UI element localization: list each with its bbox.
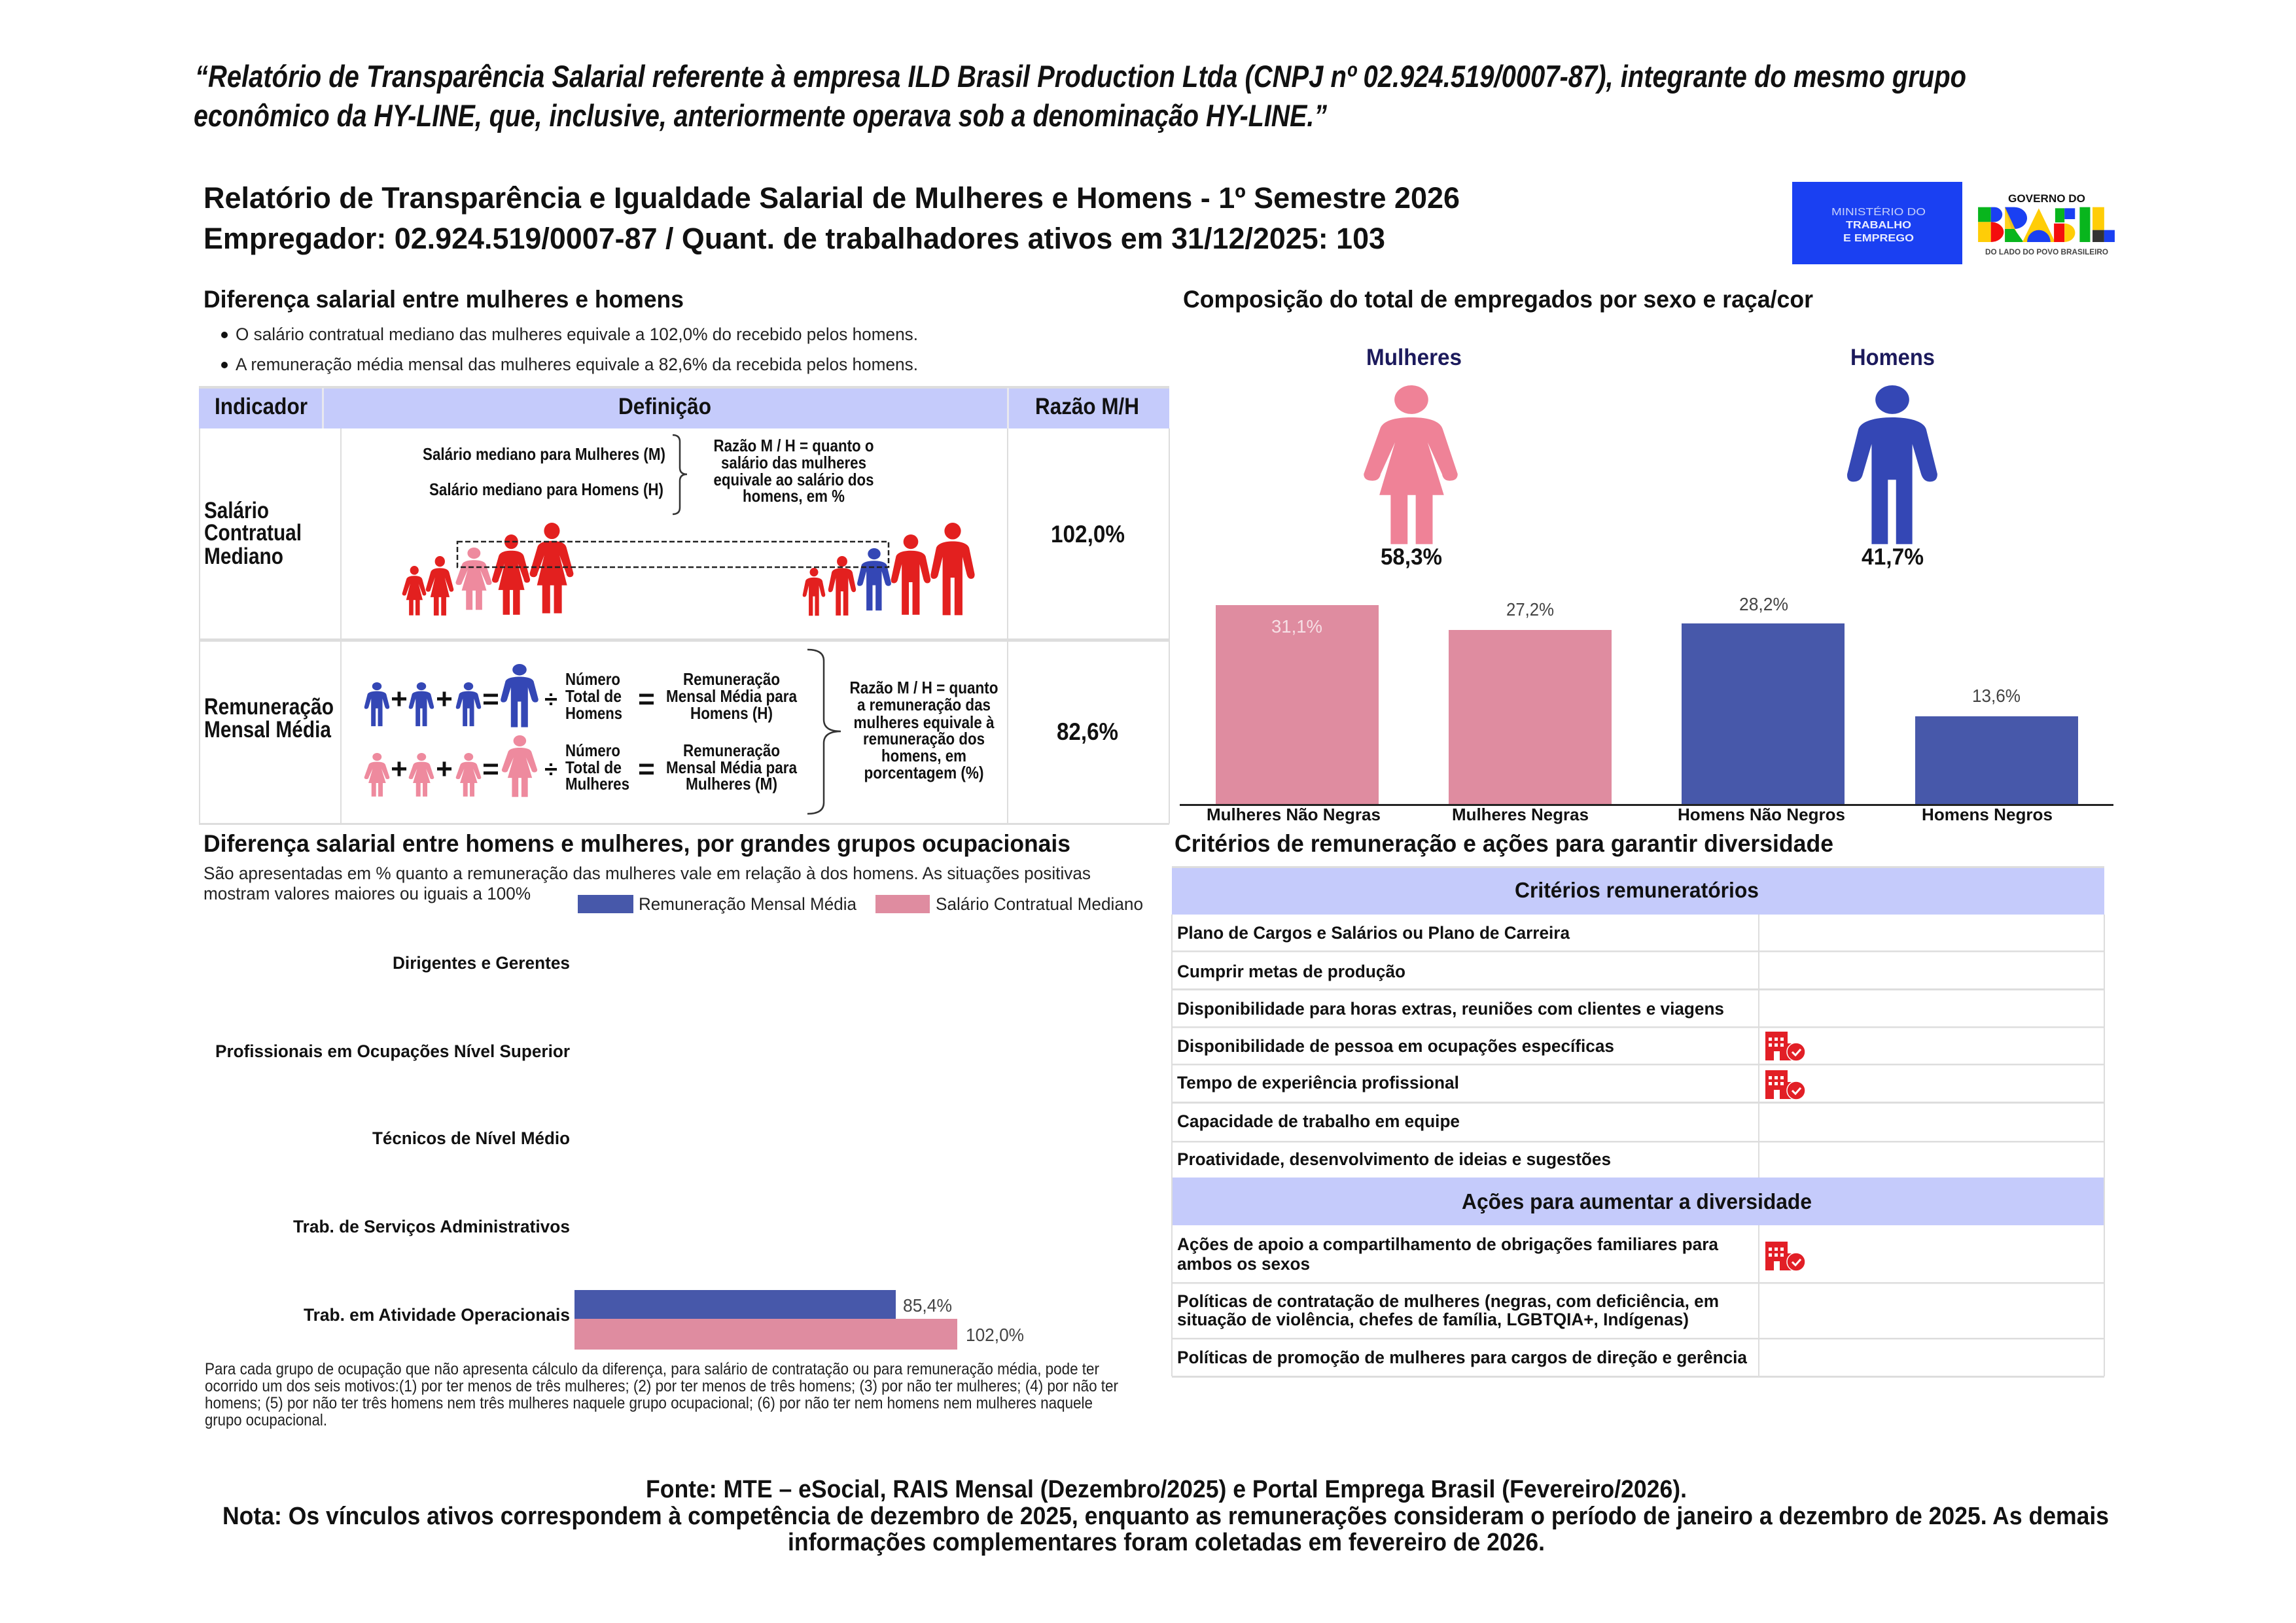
- logo: Ministério do Trabalho e Emprego: TRABALHO: [1846, 220, 1911, 231]
- actions list: Ações de apoio a compartilhamento de obrigações familiares para: [1177, 1234, 1719, 1254]
- value: 102,0%: 102,0%: [1051, 521, 1125, 548]
- legend: [578, 894, 1143, 914]
- icon group: women share: [1364, 345, 1462, 570]
- formula: women average pay: +: [436, 753, 453, 785]
- formula: men average pay: Total de: [565, 686, 622, 706]
- heading: occupational groups: Diferença salarial entre homens e mulheres, por grandes grupos ocupacionais: [203, 830, 1070, 857]
- criteria list: Plano de Cargos e Salários ou Plano de Carreira: [1177, 923, 1570, 943]
- formula: men average pay: [364, 664, 797, 727]
- footnote on missing groups: Para cada grupo de ocupação que não apresenta cálculo da diferença, para salário de contratação ou para remuneração média, pode ter: [205, 1360, 1099, 1378]
- logo: Governo do Brasil: DO LADO DO POVO BRASILEIRO: [1985, 247, 2108, 256]
- icon group: women share: 58,3%: [1381, 544, 1442, 570]
- bar: Homens Não Negros: Homens Não Negros: [1678, 805, 1845, 824]
- heading: wage gap: Diferença salarial entre mulheres e homens: [203, 286, 684, 313]
- criteria list: Capacidade de trabalho em equipe: [1177, 1111, 1460, 1131]
- table bands and rules: [1171, 866, 2105, 1378]
- formula: women average pay: Remuneração: [683, 741, 780, 760]
- logo: Ministério do Trabalho e Emprego: [1792, 182, 1962, 264]
- ratio explanation: average pay: remuneração dos: [863, 729, 985, 748]
- band title: ações para aumentar a diversidade: Ações para aumentar a diversidade: [1462, 1189, 1812, 1213]
- quoted note at top of page: econômico da HY-LINE, que, inclusive, anteriormente operava sob a denominação HY-LINE.”: [194, 98, 1327, 133]
- criteria list: Tempo de experiência profissional: [1177, 1073, 1459, 1092]
- row label: remuneração mensal média: Mensal Média: [204, 717, 331, 742]
- icon group: men share: 41,7%: [1862, 544, 1924, 570]
- formula: men average pay: Homens: [565, 703, 622, 723]
- chart axis: [1180, 804, 2113, 806]
- ratio explanation: median wage: [713, 436, 874, 506]
- panel: indicators table: [199, 386, 1170, 825]
- median wage definition text: Salário mediano para Homens (H): [429, 480, 663, 499]
- formula: women average pay: Número: [565, 741, 620, 760]
- bar chart: occupational groups: [215, 953, 1024, 1350]
- criteria list: [1177, 923, 1724, 1169]
- logo: Ministério do Trabalho e Emprego: E EMPREGO: [1843, 233, 1914, 244]
- formula: men average pay: +: [391, 683, 408, 715]
- bar: Mulheres Negras: [1449, 599, 1612, 824]
- report title: Empregador: 02.924.519/0007-87 / Quant. de trabalhadores ativos em 31/12/2025: 103: [203, 222, 1385, 255]
- table column headers: Razão M/H: [1035, 394, 1139, 419]
- formula: men average pay: +: [436, 683, 453, 715]
- logo: Ministério do Trabalho e Emprego: MINISTÉRIO DO: [1831, 205, 1926, 218]
- source and note: informações complementares foram coletadas em fevereiro de 2026.: [788, 1529, 1545, 1556]
- ratio explanation: average pay: Razão M / H = quanto: [849, 678, 998, 697]
- criteria list: Cumprir metas de produção: [1177, 962, 1405, 981]
- actions list: situação de violência, chefes de família, LGBTQIA+, Indígenas): [1177, 1310, 1689, 1329]
- bar: remuneração mensal média 85,4%: 85,4%: [903, 1295, 952, 1316]
- formula: women average pay: [364, 735, 797, 797]
- heading: criteria and actions: Critérios de remuneração e ações para garantir diversidade: [1174, 830, 1833, 857]
- criteria list: Proatividade, desenvolvimento de ideias e sugestões: [1177, 1149, 1611, 1169]
- formula: men average pay: =: [638, 683, 655, 715]
- row label: salário contratual mediano: Mediano: [204, 544, 283, 569]
- formula: women average pay: =: [638, 753, 655, 785]
- logo: Governo do Brasil: GOVERNO DO: [2008, 192, 2085, 205]
- bar: Homens Não Negros: [1678, 594, 1845, 824]
- footnote on missing groups: ocorrido um dos seis motivos:(1) por ter menos de três mulheres; (2) por ter menos de três homens; (3) por não ter mulheres; (4) por não ter: [205, 1377, 1118, 1395]
- footnote on missing groups: grupo ocupacional.: [205, 1411, 327, 1429]
- icon group: men share: [1847, 345, 1937, 570]
- icon: line of women ordered by wage: [402, 523, 573, 616]
- bullet statements: A remuneração média mensal das mulheres equivale a 82,6% da recebida pelos homens.: [236, 355, 918, 374]
- footnote on missing groups: homens; (5) por não ter três homens nem três mulheres naquele grupo ocupacional; (6) por não ter nem homens nem mulheres naquele: [205, 1394, 1093, 1412]
- table column headers: Indicador: [215, 394, 308, 419]
- bar chart: sex and race: [1180, 594, 2113, 824]
- bar: Homens Negros: Homens Negros: [1922, 805, 2053, 824]
- category labels: Técnicos de Nível Médio: [372, 1128, 570, 1148]
- bar: salário contratual mediano 102,0%: [574, 1319, 1024, 1350]
- icon: company check, experience: [1765, 1070, 1805, 1100]
- ratio explanation: median wage: salário das mulheres: [721, 453, 866, 472]
- chart description: mostram valores maiores ou iguais a 100%: [203, 884, 531, 903]
- category labels: Trab. de Serviços Administrativos: [293, 1217, 570, 1236]
- ratio explanation: average pay: homens, em: [881, 746, 966, 765]
- chart description: [203, 864, 1091, 903]
- ratio explanation: median wage: Razão M / H = quanto o: [713, 436, 874, 455]
- bar: Homens Não Negros: 28,2%: [1739, 594, 1788, 614]
- row label: salário contratual mediano: [204, 498, 302, 569]
- source and note: [222, 1476, 2109, 1556]
- icon: company check, family duties: [1765, 1242, 1805, 1271]
- actions list: Políticas de promoção de mulheres para cargos de direção e gerência: [1177, 1348, 1748, 1367]
- formula: women average pay: ÷: [544, 756, 557, 782]
- criteria list: Disponibilidade para horas extras, reuniões com clientes e viagens: [1177, 999, 1724, 1019]
- row label: salário contratual mediano: Contratual: [204, 520, 302, 546]
- formula: women average pay: Mensal Média para: [666, 758, 797, 777]
- logo: Governo do Brasil: [1978, 192, 2115, 256]
- actions list: [1177, 1234, 1748, 1367]
- heading: workforce composition: Composição do total de empregados por sexo e raça/cor: [1183, 286, 1813, 313]
- criteria list: Disponibilidade de pessoa em ocupações específicas: [1177, 1036, 1614, 1056]
- source and note: Nota: Os vínculos ativos correspondem à competência de dezembro de 2025, enquanto as remunerações consideram o período de janeiro a dezembro de 2025. As demais: [222, 1503, 2109, 1530]
- icon group: men share: Homens: [1850, 345, 1935, 370]
- category labels: Trab. em Atividade Operacionais: [304, 1305, 570, 1325]
- dashed median highlight: [457, 542, 889, 567]
- formula: women average pay: Mulheres: [565, 774, 629, 794]
- row label: remuneração mensal média: Remuneração: [204, 694, 334, 720]
- table column headers: Definição: [618, 394, 711, 419]
- median wage definition text: [423, 444, 665, 499]
- formula: women average pay: Mulheres (M): [686, 774, 777, 794]
- category labels: Dirigentes e Gerentes: [393, 953, 570, 973]
- bar: salário contratual mediano 102,0%: 102,0%: [966, 1325, 1024, 1345]
- icon: company check, occupations: [1765, 1032, 1805, 1061]
- ratio explanation: average pay: a remuneração das: [857, 695, 991, 714]
- value: 82,6%: 82,6%: [1057, 718, 1118, 745]
- legend: Remuneração Mensal Média: [639, 894, 857, 914]
- ratio explanation: median wage: equivale ao salário dos: [713, 470, 874, 489]
- formula: men average pay: ÷: [544, 686, 557, 712]
- quoted note at top of page: “Relatório de Transparência Salarial referente à empresa ILD Brasil Production Ltda (CNPJ nº 02.924.519/0007-87), integrante do mesmo grupo: [195, 59, 1966, 94]
- bar: Mulheres Não Negras: [1207, 605, 1381, 824]
- bar: Mulheres Negras: 27,2%: [1506, 599, 1554, 620]
- brace: median wage: [673, 435, 687, 514]
- formula: men average pay: Remuneração: [683, 669, 780, 689]
- panel: criteria and diversity table: [1171, 866, 2105, 1378]
- category labels: Profissionais em Ocupações Nível Superior: [215, 1041, 570, 1061]
- ratio explanation: average pay: porcentagem (%): [864, 763, 984, 782]
- band title: critérios remuneratórios: Critérios remuneratórios: [1515, 878, 1759, 902]
- bar: Mulheres Não Negras: Mulheres Não Negras: [1207, 805, 1381, 824]
- formula: women average pay: +: [391, 753, 408, 785]
- bar: Mulheres Não Negras: 31,1%: [1271, 616, 1322, 637]
- formula: men average pay: Número: [565, 669, 620, 689]
- formula: women average pay: Total de: [565, 758, 622, 777]
- row label: remuneração mensal média: [204, 694, 334, 742]
- legend: Salário Contratual Mediano: [936, 894, 1143, 914]
- formula: men average pay: =: [482, 683, 499, 715]
- chart description: São apresentadas em % quanto a remuneração das mulheres vale em relação à dos homens. As situações positivas: [203, 864, 1091, 883]
- ratio explanation: average pay: [849, 678, 998, 782]
- bar: remuneração mensal média 85,4%: [574, 1290, 952, 1319]
- ratio explanation: median wage: homens, em %: [743, 486, 845, 506]
- bullet statements: [221, 324, 918, 374]
- formula: men average pay: Homens (H): [690, 703, 773, 723]
- category labels: [215, 953, 570, 1325]
- ratio explanation: average pay: mulheres equivale à: [853, 712, 995, 732]
- source and note: Fonte: MTE – eSocial, RAIS Mensal (Dezembro/2025) e Portal Emprega Brasil (Fevereiro/2026).: [646, 1476, 1687, 1503]
- report title: [203, 181, 1460, 255]
- bar: Homens Negros: [1915, 686, 2078, 824]
- formula: women average pay: =: [482, 753, 499, 785]
- icon: line of men ordered by wage: [803, 523, 975, 616]
- icon group: women share: Mulheres: [1366, 345, 1462, 370]
- actions list: Políticas de contratação de mulheres (negras, com deficiência, em: [1177, 1291, 1719, 1311]
- row label: salário contratual mediano: Salário: [204, 498, 269, 523]
- table column headers: [215, 394, 1139, 419]
- report title: Relatório de Transparência e Igualdade Salarial de Mulheres e Homens - 1º Semestre 2026: [203, 181, 1460, 215]
- quoted note at top of page: [194, 59, 1966, 133]
- median wage definition text: Salário mediano para Mulheres (M): [423, 444, 665, 464]
- bar: Homens Negros: 13,6%: [1972, 686, 2021, 706]
- bar: Mulheres Negras: Mulheres Negras: [1452, 805, 1589, 824]
- footnote on missing groups: [205, 1360, 1118, 1429]
- brace: average pay: [807, 650, 841, 814]
- table frame and header band: [199, 386, 1170, 825]
- formula: men average pay: Mensal Média para: [666, 686, 797, 706]
- bullet statements: O salário contratual mediano das mulheres equivale a 102,0% do recebido pelos homens.: [236, 324, 918, 344]
- actions list: ambos os sexos: [1177, 1254, 1310, 1274]
